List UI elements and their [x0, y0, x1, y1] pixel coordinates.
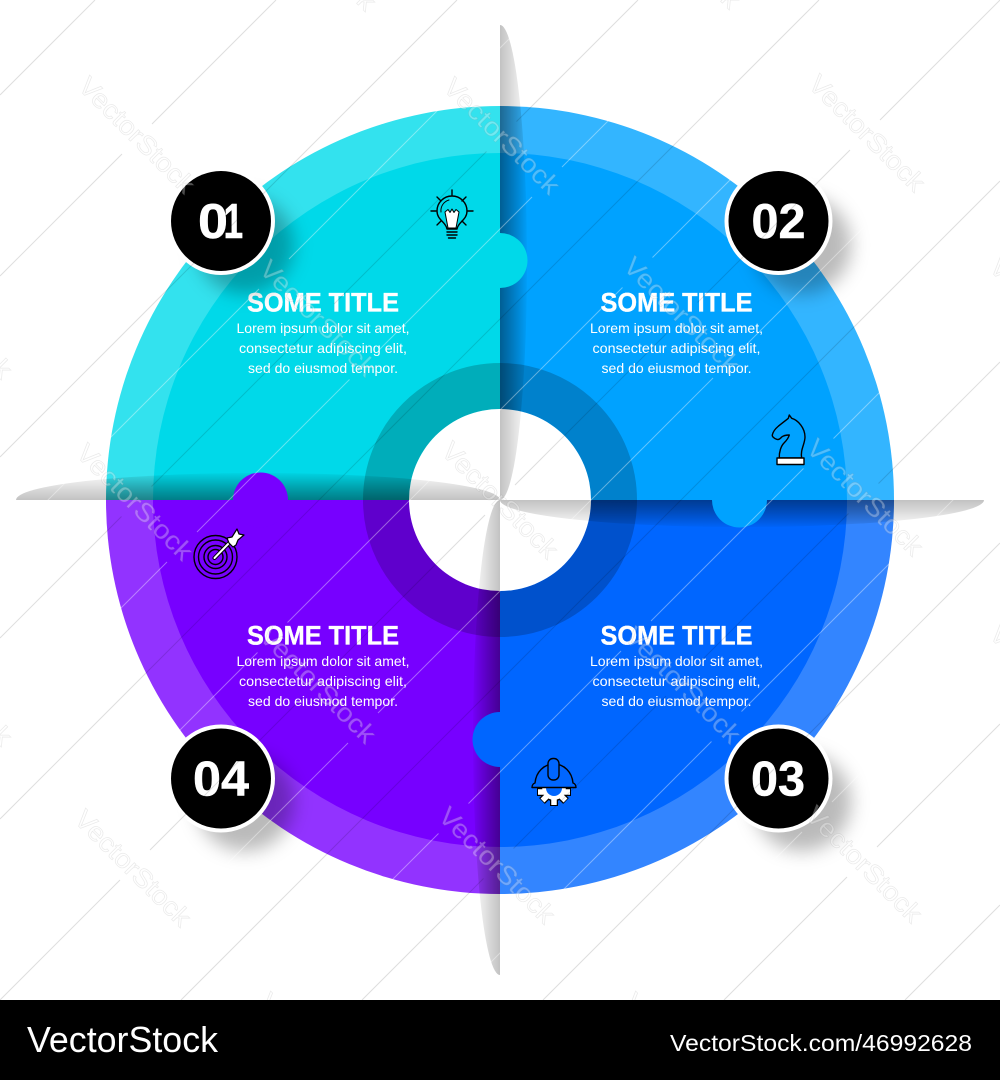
heading: SOME TITLE	[247, 288, 399, 318]
footer logo text: VectorStock	[27, 1019, 219, 1060]
icon: chess knight	[772, 415, 805, 464]
number badge 02: 02	[752, 195, 806, 249]
body text: consectetur adipiscing elit,	[239, 340, 407, 356]
quadrant 1 cyan sector	[106, 106, 500, 500]
quadrant 3 blue sector	[500, 500, 894, 894]
VectorStock watermarks: VectorStock	[803, 69, 932, 198]
centre dark ring	[386, 386, 614, 614]
body text: Lorem ipsum dolor sit amet,	[236, 653, 410, 669]
number badge 04: 04	[193, 752, 249, 806]
tab: cyan	[472, 233, 528, 288]
quadrant 2 light blue sector	[500, 106, 894, 500]
body text: sed do eiusmod tempor.	[602, 693, 752, 709]
body text: consectetur adipiscing elit,	[239, 673, 407, 689]
VectorStock watermarks: VectorStock	[73, 71, 202, 200]
VectorStock watermarks: VectorStock	[254, 621, 383, 750]
body text: Lorem ipsum dolor sit amet,	[590, 320, 763, 336]
VectorStock watermarks: VectorStock	[618, 251, 747, 380]
body text	[590, 653, 763, 709]
body text: Lorem ipsum dolor sit amet,	[236, 320, 410, 336]
tab: blue	[472, 712, 528, 767]
footer image id: VectorStock.com/46992628	[670, 1030, 972, 1056]
icon: helmet and gear	[532, 758, 576, 806]
panel: step 2 content	[590, 288, 805, 464]
heading: SOME TITLE	[600, 620, 752, 650]
number badge 02	[724, 167, 851, 294]
body text: Lorem ipsum dolor sit amet,	[590, 653, 763, 669]
centre hole	[409, 409, 591, 591]
VectorStock watermarks: VectorStock	[800, 800, 929, 929]
footer bar	[0, 1000, 1000, 1080]
number badge 01	[167, 167, 294, 294]
quadrant 4 purple sector	[106, 500, 500, 894]
number badge 03: 03	[751, 752, 805, 806]
body text	[236, 320, 410, 376]
body text	[590, 320, 763, 376]
VectorStock watermarks: VectorStock	[438, 72, 567, 201]
number badge 03	[724, 724, 851, 851]
number badge 04	[167, 724, 294, 851]
VectorStock watermarks: VectorStock	[71, 438, 200, 567]
VectorStock watermarks: VectorStock	[436, 436, 565, 565]
body text: consectetur adipiscing elit,	[592, 673, 760, 689]
VectorStock watermarks: VectorStock	[433, 801, 562, 930]
panel: step 4 content	[194, 529, 410, 709]
circular puzzle disk	[106, 106, 894, 894]
heading: SOME TITLE	[600, 288, 752, 318]
number badge 01: 0	[198, 195, 228, 249]
number badge 01: 1	[224, 194, 243, 249]
icon: target with arrow	[194, 529, 244, 578]
VectorStock watermarks: VectorStock	[619, 621, 748, 750]
icon: light bulb	[431, 190, 473, 238]
puzzle tabs	[233, 233, 767, 767]
body text	[236, 653, 410, 709]
panel: step 1 content	[236, 190, 473, 376]
heading: SOME TITLE	[247, 620, 399, 650]
VectorStock watermarks: VectorStock	[69, 804, 198, 933]
body text: sed do eiusmod tempor.	[602, 360, 752, 376]
tab: light blue	[712, 472, 767, 528]
tab: purple	[233, 472, 288, 528]
panel: step 3 content	[532, 620, 763, 806]
VectorStock watermarks: VectorStock	[801, 433, 930, 562]
body text: consectetur adipiscing elit,	[592, 340, 760, 356]
VectorStock watermarks: VectorStock	[254, 254, 383, 383]
body text: sed do eiusmod tempor.	[248, 360, 398, 376]
body text: sed do eiusmod tempor.	[248, 693, 398, 709]
